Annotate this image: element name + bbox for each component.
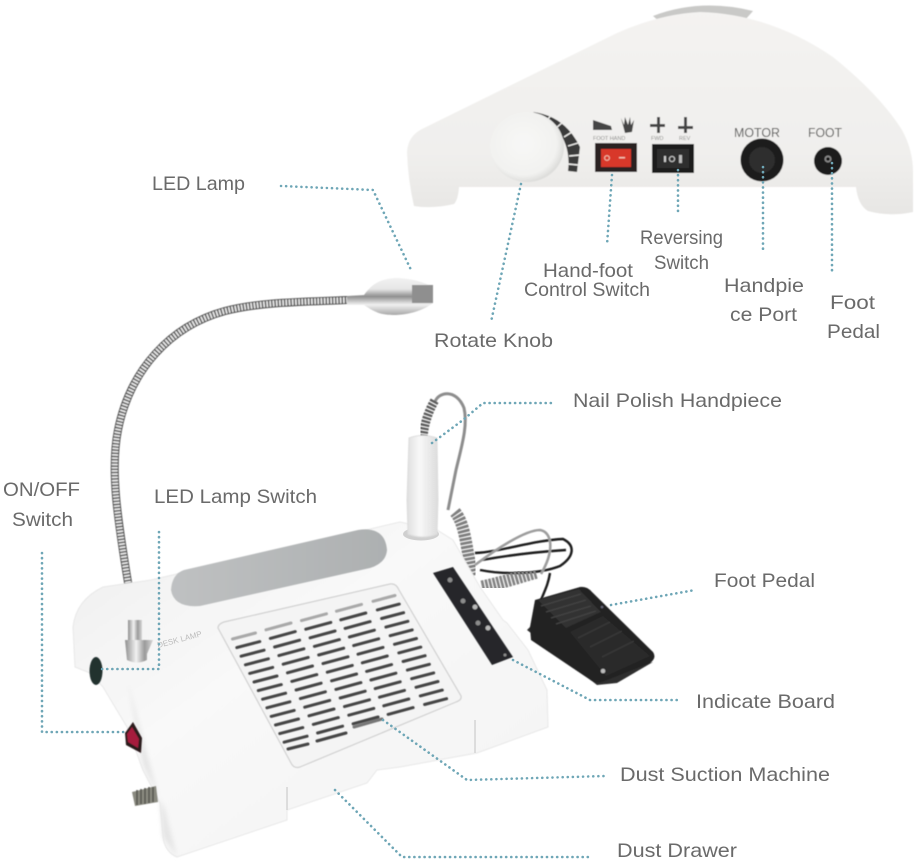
panel: main base unit (73, 436, 548, 857)
label: Reversing Switch (640, 227, 723, 274)
grey hand rest pad (171, 529, 387, 606)
foot pedal (527, 587, 654, 685)
MOTOR label on device: MOTOR (734, 125, 780, 140)
label: ON/OFF Switch: Switch (12, 509, 73, 531)
DESK LAMP print: DESK LAMP (156, 629, 203, 650)
leader: Reversing Switch (677, 170, 679, 215)
leader: Indicate Board (513, 660, 680, 700)
black pedal cable loops (475, 530, 572, 600)
label: Foot Pedal port (827, 292, 880, 343)
gooseneck LED lamp (115, 278, 433, 625)
handpiece holder collar (403, 528, 439, 540)
top cap (653, 6, 753, 22)
rotate knob (490, 112, 564, 182)
reversing switch icons (650, 117, 693, 133)
speed scale (533, 112, 580, 172)
gray coil cable (482, 572, 537, 587)
motor port (740, 138, 784, 182)
tiny panel captions: FOOT HAND (593, 136, 625, 142)
label: LED Lamp Switch: LED Lamp Switch (154, 486, 317, 508)
label: Dust Drawer: Dust Drawer (617, 840, 738, 862)
leader: Rotate Knob (491, 184, 521, 322)
label: ON/OFF Switch: ON/OFF (3, 479, 80, 501)
handpiece body (407, 436, 438, 537)
label: Reversing Switch: Reversing (640, 227, 723, 249)
tiny panel captions: FWD (651, 136, 664, 142)
label: Rotate Knob: Rotate Knob (434, 330, 553, 352)
label: Reversing Switch: Switch (654, 252, 709, 274)
red rocker switch (595, 143, 637, 172)
leader: Nail Polish Handpiece (432, 403, 553, 443)
label: Hand-foot Control Switch: Control Switch (524, 279, 650, 301)
label: Nail Polish Handpiece: Nail Polish Handpiece (573, 390, 782, 412)
threaded connector (132, 786, 158, 806)
leader: ON/OFF Switch (42, 553, 125, 732)
FOOT label on device: FOOT (808, 125, 842, 140)
leader: Dust Suction Machine (383, 720, 605, 780)
leader: Foot Pedal port (831, 163, 833, 272)
label: Handpiece Port: Handpie (724, 275, 804, 297)
leader: Foot Pedal (611, 590, 695, 605)
lamp mount (125, 620, 153, 662)
panel: rear view of device (407, 6, 913, 214)
leader: Handpiece Port (762, 167, 764, 250)
drawer seams (287, 720, 475, 810)
label: Foot Pedal port: Foot (830, 292, 876, 314)
label: Foot Pedal: Foot Pedal (714, 570, 815, 592)
black reversing switch (652, 144, 694, 173)
label: Indicate Board: Indicate Board (696, 691, 835, 713)
rear housing (407, 12, 913, 214)
label: Hand-foot Control Switch (524, 260, 650, 301)
label: LED Lamp: LED Lamp (152, 173, 245, 195)
lamp head (347, 278, 433, 315)
callout lines (42, 163, 832, 857)
label: Foot Pedal port: Pedal (827, 321, 880, 343)
red power switch (125, 722, 142, 753)
label: ON/OFF Switch (3, 479, 80, 531)
foot and hand icons (593, 117, 634, 133)
label: Handpiece Port: ce Port (730, 304, 798, 326)
lamp switch (90, 657, 102, 685)
side shading (128, 683, 177, 857)
label: Dust Suction Machine: Dust Suction Machine (620, 764, 830, 786)
indicator board (433, 567, 513, 665)
leader: Dust Drawer (335, 790, 592, 857)
label: Handpiece Port (724, 275, 804, 326)
foot port (814, 147, 842, 175)
tiny panel captions: REV (679, 136, 691, 142)
handpiece cable (423, 394, 473, 577)
tiny panel captions (593, 136, 691, 142)
label: Hand-foot Control Switch: Hand-foot (543, 260, 634, 282)
dust suction grille (218, 584, 461, 768)
grille slots (232, 596, 447, 749)
base housing (73, 522, 548, 857)
leader: LED Lamp Switch (100, 532, 159, 669)
leader: Hand-foot Control Switch (607, 175, 612, 245)
leader: LED Lamp (281, 186, 412, 272)
